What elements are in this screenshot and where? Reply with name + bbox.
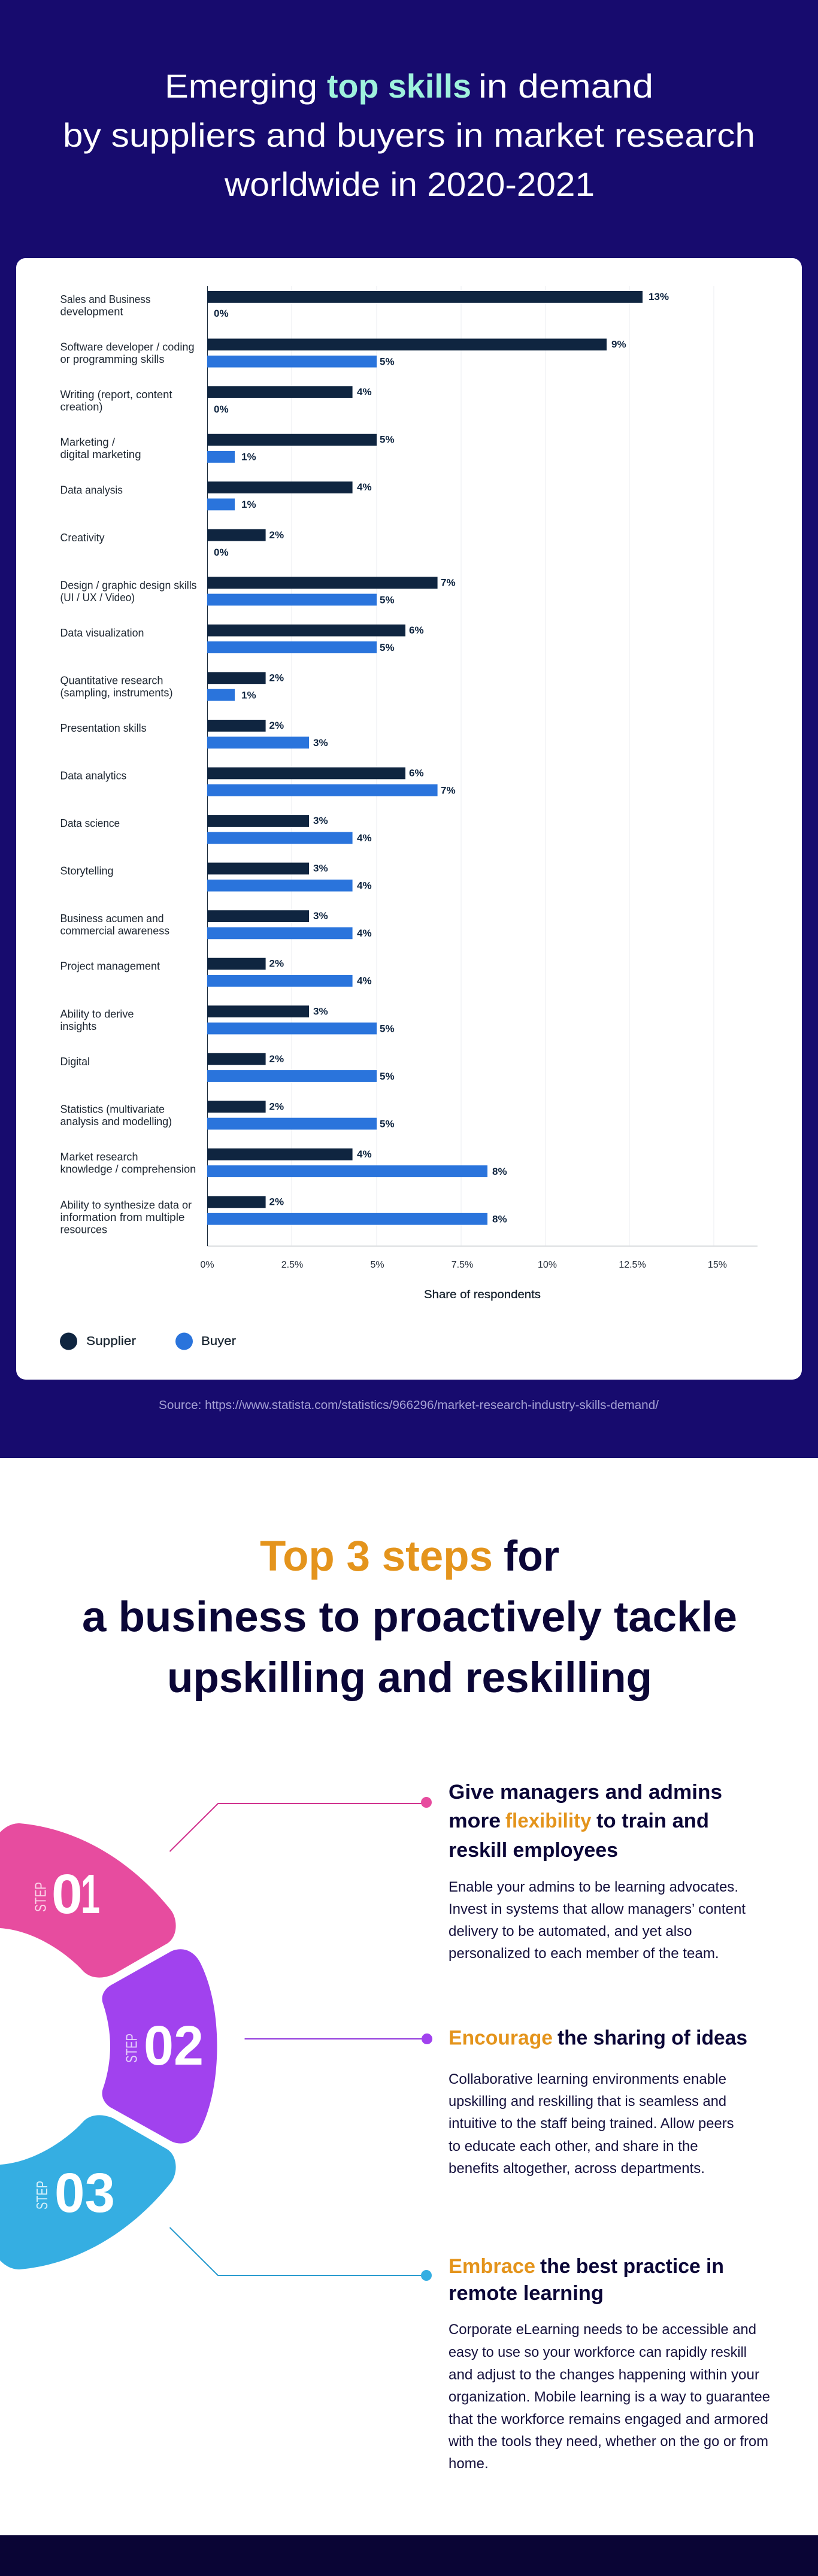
bar chart row: Storytelling: Storytelling bbox=[60, 865, 114, 877]
bar chart row: Software developer bbox=[60, 339, 626, 368]
bar chart row: Ability to derive insights: Ability to derive bbox=[60, 1007, 134, 1020]
body: step 3: easy to use so your workforce can rapidly reskill bbox=[449, 2344, 747, 2360]
section heading: top 3 steps: Top 3 steps bbox=[260, 1533, 493, 1580]
heading: step 1 bbox=[449, 1781, 722, 1862]
x axis tick labels: 15% bbox=[708, 1260, 727, 1270]
heading: step 3: the best practice in bbox=[540, 2255, 724, 2278]
heading: step 3: Embrace bbox=[449, 2255, 535, 2278]
x axis tick labels: 0% bbox=[200, 1260, 214, 1270]
bar chart row: Ability to synthesize bbox=[60, 1196, 507, 1236]
heading: step 2 bbox=[449, 2026, 747, 2049]
bar chart row: Data visualization: 5% bbox=[380, 642, 395, 653]
bar chart row: Presentation skills: Presentation skills bbox=[60, 722, 146, 734]
connector: step 3 bbox=[170, 2228, 432, 2281]
bar chart row: Creativity: 0% bbox=[214, 547, 229, 558]
bar chart row: Digital: 2% bbox=[269, 1053, 284, 1065]
bar chart row: Writing: creation) bbox=[60, 401, 103, 413]
bar chart row: Digital: Digital bbox=[60, 1055, 90, 1068]
body: step 1: Enable your admins to be learning advocates. bbox=[449, 1879, 738, 1895]
bar chart row: Market research knowledge bbox=[60, 1148, 507, 1177]
bar chart row: Marketing: 1% bbox=[241, 451, 256, 463]
bar chart row: Business acumen: Business acumen and bbox=[60, 912, 164, 925]
bar chart row: Market research knowledge: 8% bbox=[492, 1166, 507, 1177]
panel: chart card bbox=[16, 258, 802, 1380]
body: step 3: and adjust to the changes happening within your bbox=[449, 2366, 759, 2383]
bar chart row: Project management: Project management bbox=[60, 960, 160, 972]
bar chart row: Ability to derive insights: 3% bbox=[313, 1005, 328, 1017]
heading: step 3 bbox=[449, 2255, 724, 2305]
bar chart row: Data visualization: Data visualization bbox=[60, 626, 144, 639]
bar chart row: Data science: 3% bbox=[313, 815, 328, 826]
bar chart row: Sales and Business development: Sales and Business bbox=[60, 293, 151, 305]
bar chart row: Data analytics bbox=[60, 768, 456, 796]
x axis tick labels: 7.5% bbox=[452, 1260, 473, 1270]
title: by suppliers and buyers in market research bbox=[63, 116, 755, 154]
icon: step 01 segment: 1 bbox=[81, 1863, 100, 1925]
section heading: top 3 steps: for bbox=[504, 1533, 559, 1580]
bar chart row: Sales and Business development bbox=[60, 291, 669, 319]
bar chart row: Ability to synthesize: 2% bbox=[269, 1196, 284, 1207]
heading: step 1: reskill employees bbox=[449, 1839, 618, 1862]
body: step 3: with the tools they need, whether on the go or from bbox=[448, 2433, 768, 2450]
text block: step 2 bbox=[449, 2026, 747, 2177]
bar chart row: Ability to derive insights bbox=[60, 1005, 395, 1034]
heading: step 1: to train and bbox=[596, 1810, 709, 1832]
bar chart row: Quantitative research: Quantitative research bbox=[60, 674, 163, 686]
bar chart row: Business acumen: commercial awareness bbox=[60, 925, 169, 937]
icon: step 03 segment: STEP bbox=[33, 2181, 51, 2210]
body: step 1: delivery to be automated, and yet also bbox=[449, 1923, 692, 1939]
icon: step 02 segment: 02 bbox=[144, 2014, 204, 2077]
x axis tick labels: 5% bbox=[370, 1260, 384, 1270]
icon: step 02 segment: STEP bbox=[122, 2033, 140, 2063]
icon: step 01 segment: STEP bbox=[31, 1882, 49, 1912]
title: top skills bbox=[327, 67, 471, 105]
bar chart row: Statistics bbox=[60, 1101, 395, 1129]
bar chart row: Data science: 4% bbox=[357, 832, 372, 844]
bar chart row: Presentation skills: 3% bbox=[313, 737, 328, 748]
body: step 3: that the workforce remains engaged and armored bbox=[449, 2411, 768, 2427]
bar chart row: Writing: 4% bbox=[357, 386, 372, 398]
text block: step 3 bbox=[448, 2255, 770, 2472]
body: step 1 bbox=[449, 1879, 746, 1962]
bar chart row: Data visualization bbox=[60, 625, 424, 653]
title: in demand bbox=[478, 67, 653, 105]
body: step 1: personalized to each member of the team. bbox=[449, 1945, 719, 1962]
heading: step 3: remote learning bbox=[449, 2282, 604, 2305]
bar chart row: Quantitative research: 2% bbox=[269, 672, 284, 683]
body: step 3: Corporate eLearning needs to be accessible and bbox=[449, 2322, 756, 2338]
body: step 2: intuitive to the staff being trained. Allow peers bbox=[449, 2116, 734, 2132]
bar chart row: Digital bbox=[60, 1053, 395, 1082]
heading: step 1: more bbox=[449, 1810, 501, 1832]
bar chart row: Software developer: 5% bbox=[380, 356, 395, 368]
bar chart row: Presentation skills: 2% bbox=[269, 720, 284, 731]
bar chart row: Design: 5% bbox=[380, 594, 395, 605]
bar chart row: Software developer: or programming skills bbox=[60, 353, 164, 365]
bar chart row: Quantitative research: 1% bbox=[241, 689, 256, 701]
heading: step 1: flexibility bbox=[505, 1810, 592, 1832]
connector: step 1 bbox=[170, 1797, 432, 1851]
text block: step 1 bbox=[449, 1781, 746, 1962]
bar chart row: Data analytics: 7% bbox=[441, 784, 456, 796]
bar chart row: Data science bbox=[60, 815, 372, 844]
bar chart row: Writing: Writing (report, content bbox=[60, 388, 172, 401]
bar chart row: Marketing bbox=[60, 434, 395, 463]
x axis tick labels: 12.5% bbox=[619, 1260, 646, 1270]
bar chart row: Marketing: digital marketing bbox=[60, 448, 141, 460]
bar chart row: Statistics: analysis and modelling) bbox=[60, 1115, 172, 1128]
body: step 1: Invest in systems that allow managers’ content bbox=[449, 1901, 746, 1917]
bar chart row: Data visualization: 6% bbox=[409, 625, 424, 636]
bar chart row: Project management: 4% bbox=[357, 975, 372, 987]
bar chart row: Data analysis: 1% bbox=[241, 499, 256, 510]
source note: Source: https://www.statista.com/statistics/966296/market-research-industry-skills-demand/ bbox=[159, 1399, 659, 1412]
bar chart row: Ability to synthesize: Ability to synthesize data or bbox=[60, 1199, 192, 1211]
body: step 2: to educate each other, and share in the bbox=[449, 2138, 698, 2154]
bar chart row: Sales and Business development: development bbox=[60, 305, 123, 317]
bar chart row: Market research knowledge: knowledge / comprehension bbox=[60, 1162, 196, 1175]
footer band bbox=[0, 2535, 818, 2576]
section heading: top 3 steps: a business to proactively tackle bbox=[82, 1594, 737, 1641]
bar chart row: Design: 7% bbox=[441, 577, 456, 588]
bar chart row: Presentation skills bbox=[60, 720, 328, 748]
bar chart row: Design: (UI / UX / Video) bbox=[60, 591, 135, 604]
heading: step 2: the sharing of ideas bbox=[558, 2026, 747, 2049]
bar chart row: Software developer: Software developer / coding bbox=[60, 340, 194, 353]
heading: step 1: Give managers and admins bbox=[449, 1781, 722, 1804]
bar chart row: Design: Design / graphic design skills bbox=[60, 578, 196, 591]
bar chart row: Business acumen: 4% bbox=[357, 928, 372, 939]
section heading: top 3 steps: upskilling and reskilling bbox=[167, 1654, 652, 1702]
bar chart row: Sales and Business development: 0% bbox=[214, 308, 229, 319]
x axis tick labels: 10% bbox=[538, 1260, 557, 1270]
bar chart row: Market research knowledge: Market research bbox=[60, 1150, 138, 1163]
bar chart row: Marketing: Marketing / bbox=[60, 436, 116, 448]
bar chart row: Data analytics: 6% bbox=[409, 768, 424, 778]
bar chart row: Market research knowledge: 4% bbox=[357, 1148, 372, 1160]
bar chart row: Storytelling: 3% bbox=[313, 863, 328, 874]
bar chart row: Sales and Business development: 13% bbox=[649, 291, 669, 302]
heading: step 2: Encourage bbox=[449, 2026, 553, 2049]
bar chart row: Ability to synthesize: resources bbox=[60, 1223, 107, 1236]
bar chart row: Data analysis bbox=[60, 481, 372, 510]
bar chart row: Creativity: Creativity bbox=[60, 531, 105, 544]
bar chart row: Software developer: 9% bbox=[611, 339, 626, 350]
bar chart row: Statistics: Statistics (multivariate bbox=[60, 1102, 165, 1115]
bar chart row: Business acumen: 3% bbox=[313, 910, 328, 922]
body: step 3 bbox=[448, 2322, 770, 2472]
connector: step 2 bbox=[244, 2033, 432, 2044]
icon: step 03 segment: 03 bbox=[54, 2162, 115, 2224]
bar chart row: Ability to synthesize: 8% bbox=[492, 1213, 507, 1225]
icon: step 01 segment: 0 bbox=[51, 1863, 83, 1925]
bar chart row: Digital: 5% bbox=[380, 1071, 395, 1082]
section heading: top 3 steps bbox=[82, 1533, 737, 1702]
bar chart row: Quantitative research bbox=[60, 672, 284, 701]
x axis tick labels: 2.5% bbox=[281, 1260, 303, 1270]
bar chart row: Ability to derive insights: 5% bbox=[380, 1023, 395, 1034]
bar chart row: Creativity: 2% bbox=[269, 529, 284, 541]
bar chart row: Data analytics: Data analytics bbox=[60, 769, 126, 782]
body: step 3: organization. Mobile learning is a way to guarantee bbox=[449, 2389, 770, 2405]
bar chart row: Statistics: 2% bbox=[269, 1101, 284, 1112]
bar chart row: Storytelling bbox=[60, 863, 372, 892]
legend bbox=[60, 1333, 236, 1350]
bar chart row: Design bbox=[60, 577, 456, 605]
x axis title: Share of respondents bbox=[424, 1289, 541, 1301]
body: step 2: benefits altogether, across departments. bbox=[449, 2160, 705, 2177]
bar chart row: Storytelling: 4% bbox=[357, 880, 372, 892]
bar chart row: Creativity bbox=[60, 529, 284, 558]
chart axes and grid bbox=[207, 286, 758, 1246]
icon: step 03 segment bbox=[0, 2115, 176, 2269]
bar chart row: Data analysis: 4% bbox=[357, 481, 372, 493]
bar chart row: Data analysis: Data analysis bbox=[60, 483, 123, 496]
x axis tick labels bbox=[200, 1260, 727, 1270]
bar chart row: Project management bbox=[60, 958, 372, 987]
legend: Buyer bbox=[201, 1335, 236, 1348]
bar chart row: Data science: Data science bbox=[60, 817, 120, 829]
bar chart row: Business acumen bbox=[60, 910, 372, 939]
body: step 2: upskilling and reskilling that is seamless and bbox=[449, 2093, 726, 2110]
title: worldwide in 2020-2021 bbox=[224, 165, 595, 203]
bar chart row: Project management: 2% bbox=[269, 958, 284, 969]
bar chart row: Quantitative research: (sampling, instruments) bbox=[60, 686, 172, 699]
title bbox=[63, 67, 755, 203]
bar chart row: Ability to synthesize: information from multiple bbox=[60, 1211, 184, 1223]
bar chart row: Writing: 0% bbox=[214, 404, 229, 415]
panel: navy chart section bbox=[0, 0, 818, 1458]
bar chart row: Ability to derive insights: insights bbox=[60, 1020, 96, 1032]
bar chart row: Marketing: 5% bbox=[380, 434, 395, 446]
body: step 3: home. bbox=[449, 2456, 489, 2472]
icon: step 01 segment bbox=[0, 1823, 176, 1978]
body: step 2: Collaborative learning environments enable bbox=[449, 2071, 726, 2087]
legend: Supplier bbox=[86, 1335, 136, 1348]
icon: step 02 segment bbox=[102, 1949, 217, 2144]
bar chart row: Statistics: 5% bbox=[380, 1118, 395, 1129]
title: Emerging bbox=[165, 67, 317, 105]
bar chart row: Writing bbox=[60, 386, 372, 415]
body: step 2 bbox=[449, 2071, 734, 2177]
